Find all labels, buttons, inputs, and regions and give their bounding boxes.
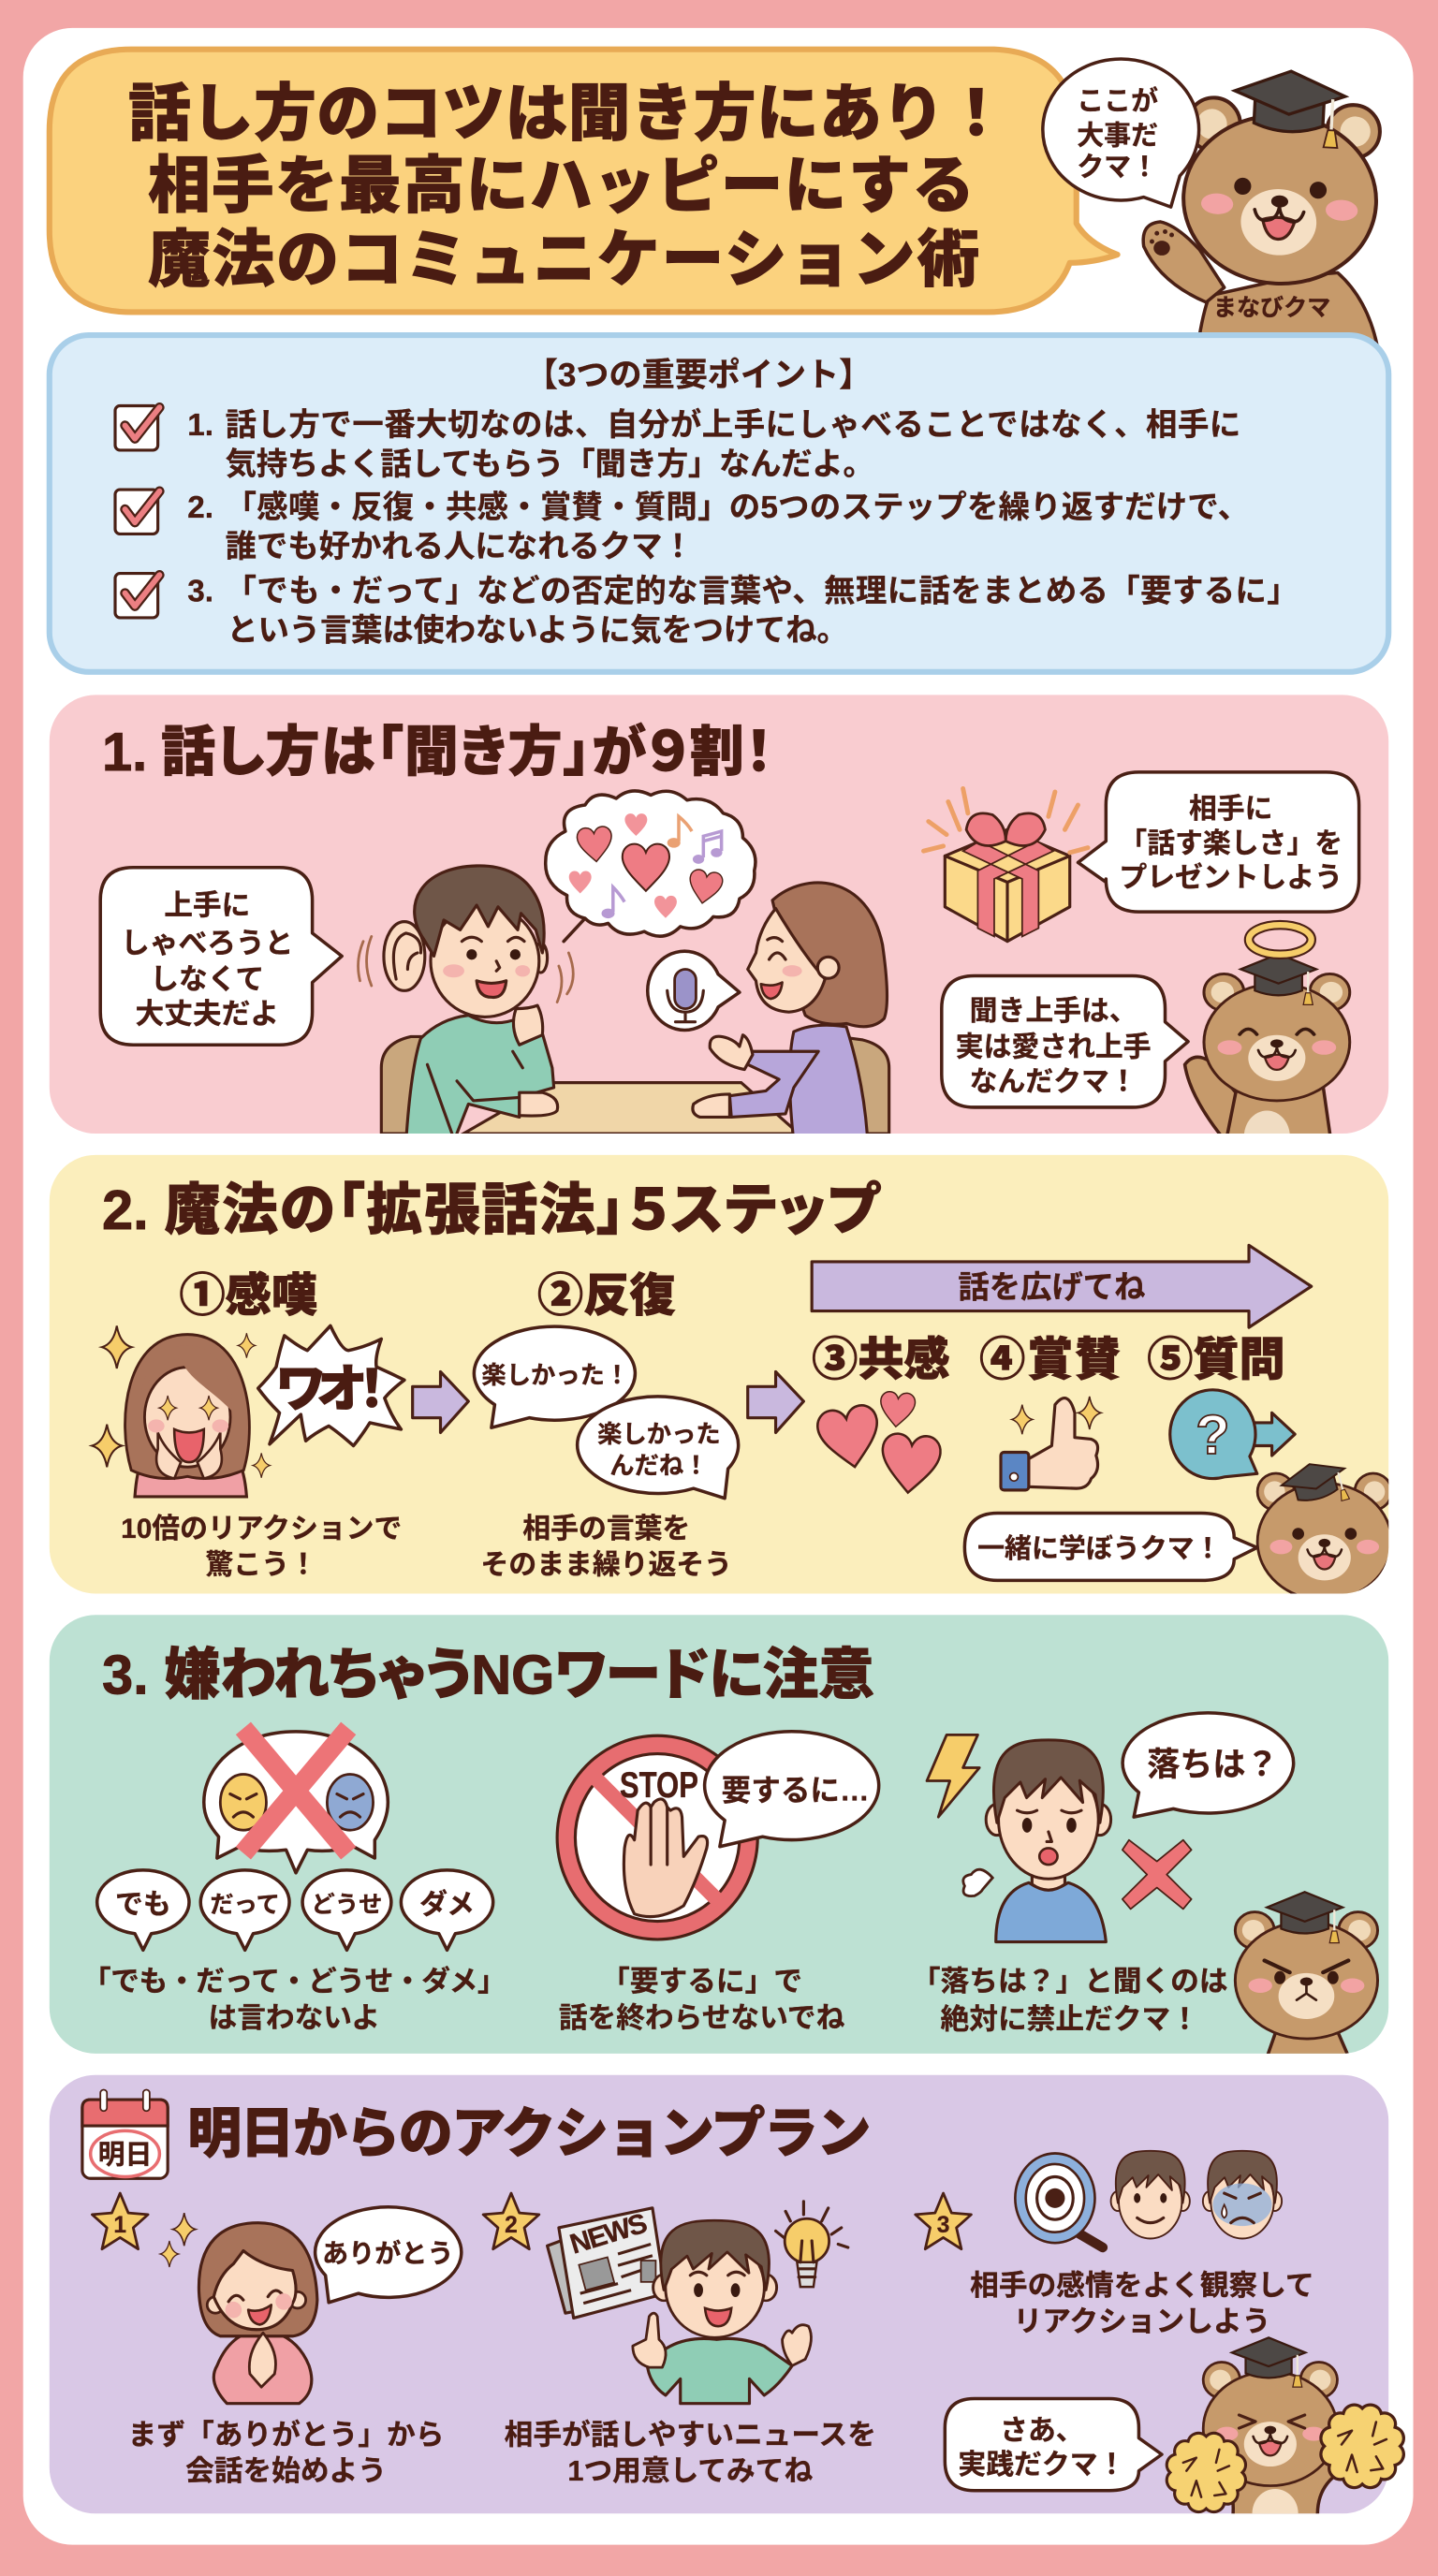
bubble: 落ちは？ — [1123, 1713, 1294, 1817]
mic bubble — [648, 951, 740, 1030]
caption: action 2: 相手が話しやすいニュースを — [505, 2419, 876, 2452]
arrow: expand the talk: 話を広げてね — [958, 1271, 1145, 1306]
caption: 落ちは: 絶対に禁止だクマ！ — [941, 2003, 1199, 2036]
bubble: 一緒に学ぼうクマ — [964, 1513, 1257, 1580]
bubble: no need to talk well: 大丈夫だよ — [136, 997, 279, 1030]
caption: action 3: 相手の感情をよく観察して — [970, 2269, 1314, 2302]
caption step 1: 驚こう！ — [206, 1549, 317, 1580]
point 3: という言葉は使わないように気をつけてね。 — [227, 613, 848, 648]
mascot: bear with halo — [1185, 925, 1350, 1164]
icon: calendar — [82, 2089, 168, 2178]
bubble: 要するに… — [705, 1732, 879, 1847]
title speech bubble — [50, 50, 1118, 312]
heading 3: 嫌われちゃうNGワードに注意 — [165, 1644, 874, 1706]
caption step 2: 相手の言葉を — [522, 1514, 690, 1544]
bubble: さあ、実践だクマ！: さあ、 — [1000, 2415, 1084, 2446]
bubble: 楽しかった！: 楽しかった！ — [481, 1361, 629, 1389]
caption: action 1 — [128, 2419, 444, 2487]
NG word bubbles: でも — [115, 1890, 171, 1921]
point 3 — [187, 574, 1299, 648]
caption: 要するに: 「要するに」で — [601, 1965, 802, 1998]
NG word bubbles: どうせ — [312, 1892, 382, 1918]
bubble: 楽しかったんだね！: んだね！ — [609, 1451, 709, 1479]
point 3: 「でも・だって」などの否定的な言葉や、無理に話をまとめる「要するに」 — [226, 574, 1299, 608]
panel 3: NG words — [50, 1615, 1388, 2062]
icon: star 1: 1 — [113, 2213, 126, 2238]
bubble: 楽しかったんだね！ — [578, 1397, 739, 1499]
icon: star 3 — [916, 2193, 971, 2249]
point 1: 気持ちよく話してもらう「聞き方」なんだよ。 — [226, 447, 874, 482]
bubble: ここが大事だクマ — [1043, 59, 1199, 207]
heading 1: 話し方は「聞き方」が９割！ — [161, 722, 772, 783]
stop sign with hand: STOP — [620, 1765, 698, 1806]
sparkles — [160, 2213, 196, 2267]
bubble: ありがとう — [315, 2207, 462, 2303]
illustration: surprised woman — [125, 1335, 249, 1497]
caption: action 1: 会話を始めよう — [185, 2454, 387, 2487]
caption: action 3: リアクションしよう — [1014, 2305, 1270, 2337]
step 5 label: ⑤質問 — [1147, 1335, 1285, 1385]
arrow: expand the talk — [812, 1245, 1312, 1327]
bubble: ここが大事だクマ: クマ！ — [1077, 153, 1158, 183]
icon: newspaper — [548, 2208, 666, 2318]
icon: calendar: 明日 — [98, 2140, 152, 2170]
point 2: 「感嘆・反復・共感・賞賛・質問」の5つのステップを繰り返すだけで、 — [226, 490, 1249, 525]
bubble: さあ、実践だクマ！: 実践だクマ！ — [958, 2450, 1125, 2481]
title line 2: 相手を最高にハッピーにする — [148, 152, 975, 221]
caption: action 2 — [505, 2419, 876, 2487]
point 1: 1. — [187, 408, 213, 443]
mascot: angry bear — [1235, 1892, 1378, 2062]
bubble: 楽しかった！ — [474, 1326, 635, 1427]
bubble: no need to talk well: しゃべろうと — [121, 927, 293, 959]
caption: NG words: 「でも・だって・どうせ・ダメ」 — [82, 1965, 506, 1998]
title line 1: 話し方のコツは聞き方にあり！ — [128, 80, 1007, 149]
illustration: talking woman — [693, 883, 888, 1142]
stop sign with hand — [557, 1735, 757, 1939]
bubble: 要するに…: 要するに… — [722, 1774, 870, 1808]
bubble: good listeners are loved: なんだクマ！ — [970, 1066, 1137, 1097]
illustration: thankful woman — [198, 2223, 317, 2404]
heading 3: 3. — [102, 1644, 149, 1706]
icon: star 2: 2 — [505, 2213, 518, 2238]
title line 3: 魔法のコミュニケーション術 — [148, 226, 979, 295]
caption: 落ちは: 「落ちは？」と聞くのは — [912, 1965, 1228, 1998]
bubble: no need to talk well: しなくて — [150, 963, 264, 996]
point 2: 誰でも好かれる人になれるクマ！ — [226, 530, 694, 564]
step 1 label: ①感嘆 — [179, 1271, 317, 1322]
sparkles — [92, 1325, 270, 1478]
icon: thumbs up — [1001, 1397, 1101, 1490]
icon: hearts — [815, 1391, 942, 1495]
panel 4: action plan — [50, 2075, 1403, 2539]
arrow: step 2 to 3 — [748, 1372, 803, 1432]
heading 1: 1. — [102, 723, 147, 783]
caption: action 1: まず「ありがとう」から — [128, 2419, 444, 2452]
caption: NG words: は言わないよ — [209, 2001, 380, 2034]
heading 2: 2. — [102, 1178, 149, 1241]
icon: check 2 — [115, 490, 159, 534]
point 2: 2. — [187, 490, 213, 525]
bubble: 一緒に学ぼうクマ: 一緒に学ぼうクマ！ — [977, 1534, 1222, 1564]
bubble: ここが大事だクマ: ここが — [1077, 86, 1158, 117]
burst bubble: ワオ！ — [258, 1325, 404, 1445]
caption: 要するに — [559, 1965, 845, 2034]
bubble: good listeners are loved: 聞き上手は、 — [970, 996, 1137, 1027]
caption step 2: そのまま繰り返そう — [481, 1549, 732, 1580]
panel 2: 5 steps — [50, 1155, 1391, 1600]
burst bubble: ワオ！: ワオ！ — [276, 1360, 385, 1417]
icon: star 2 — [483, 2193, 539, 2249]
NG word bubbles: ダメ — [419, 1889, 475, 1921]
icon: red cross — [1123, 1840, 1192, 1909]
mascot name label: まなびクマ — [1213, 295, 1330, 321]
icon: lightning — [927, 1734, 979, 1817]
caption step 1: 10倍のリアクションで — [121, 1514, 402, 1544]
mascot: graduate bear waving — [1143, 68, 1381, 345]
mascot: cheering bear with pom-poms — [1202, 2336, 1339, 2514]
mascot: bear with cap — [1256, 1463, 1389, 1593]
heading: key points: 【3つの重要ポイント】 — [525, 357, 872, 393]
icon: smiling face — [1111, 2151, 1190, 2239]
bubble: good listeners are loved — [942, 976, 1188, 1107]
arrow: step 1 to 2 — [413, 1372, 468, 1432]
icon: magnifier with eye — [1020, 2159, 1103, 2247]
NG word bubbles: だって — [210, 1892, 280, 1918]
illustration: table and chairs — [381, 1036, 889, 1134]
panel: 3 key points — [50, 335, 1388, 672]
crossed-out bubble with faces — [204, 1728, 388, 1873]
illustration: annoyed man — [963, 1740, 1111, 1942]
caption: NG words — [82, 1965, 506, 2034]
icon: sad face — [1203, 2151, 1282, 2239]
heading 2: 魔法の「拡張話法」５ステップ — [165, 1178, 881, 1241]
bubble: no need to talk well — [100, 868, 342, 1045]
point 2 — [187, 490, 1249, 564]
NG word bubbles — [97, 1870, 493, 1950]
bubble: ありがとう: ありがとう — [322, 2238, 454, 2268]
panel 1: listening — [50, 695, 1388, 1164]
caption: action 2: 1つ用意してみてね — [567, 2454, 813, 2487]
caption: action 3 — [970, 2269, 1314, 2337]
bubble: give the joy of talking: 相手に — [1189, 794, 1272, 825]
icon: check 3 — [115, 574, 159, 618]
step 2 label: ②反復 — [537, 1271, 675, 1322]
bubble: 落ちは？: 落ちは？ — [1147, 1747, 1279, 1783]
step 4 label: ④賞賛 — [979, 1335, 1121, 1385]
icon: question — [1170, 1390, 1295, 1479]
point 1 — [187, 407, 1240, 482]
thought cloud with hearts and notes — [546, 791, 756, 942]
icon: gift box — [924, 788, 1088, 942]
pom-poms — [1167, 2405, 1403, 2512]
point 1: 話し方で一番大切なのは、自分が上手にしゃべることではなく、相手に — [226, 407, 1240, 443]
point 3: 3. — [187, 574, 213, 608]
bubble: good listeners are loved: 実は愛され上手 — [956, 1032, 1152, 1063]
bubble: さあ、実践だクマ！ — [945, 2398, 1162, 2491]
heading 4: 明日からのアクションプラン — [187, 2104, 871, 2164]
bubble: ここが大事だクマ: 大事だ — [1077, 121, 1158, 151]
caption step 1 — [121, 1514, 402, 1580]
bubble: give the joy of talking — [1078, 772, 1359, 912]
icon: newspaper: NEWS — [566, 2208, 651, 2261]
illustration: man with idea — [633, 2220, 811, 2404]
bubble: give the joy of talking: 「話す楽しさ」を — [1119, 828, 1343, 859]
bubble: no need to talk well: 上手に — [164, 889, 250, 922]
icon: check 1 — [115, 406, 159, 450]
caption: 落ちは — [912, 1965, 1228, 2036]
icon: star 3: 3 — [937, 2213, 949, 2238]
bubble: 楽しかったんだね！: 楽しかった — [597, 1420, 721, 1448]
bubble: give the joy of talking: プレゼントしよう — [1119, 863, 1343, 894]
icon: star 1 — [92, 2193, 148, 2249]
illustration: listening man — [359, 866, 573, 1142]
icon: light bulb — [776, 2202, 848, 2287]
icon: question: ? — [1196, 1403, 1230, 1466]
caption step 2 — [481, 1514, 732, 1580]
step 3 label: ③共感 — [812, 1335, 950, 1385]
caption: 要するに: 話を終わらせないでね — [559, 2001, 845, 2034]
